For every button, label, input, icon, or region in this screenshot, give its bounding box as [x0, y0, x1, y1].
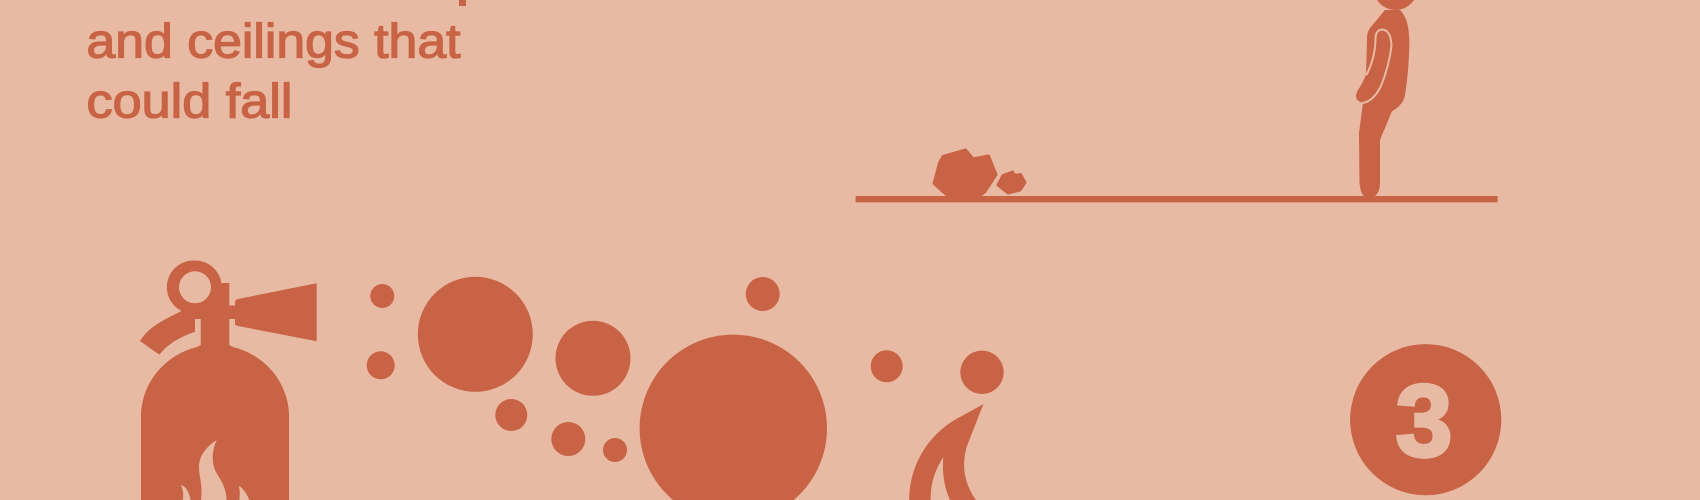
- text block: hazard description: and ceilings that: [86, 16, 460, 68]
- icon: fallen rocks: [934, 150, 1025, 196]
- icon: flame cut-out: [181, 440, 249, 500]
- text block: hazard description: could fall: [86, 76, 292, 128]
- step number badge: 3: [1396, 364, 1452, 478]
- step number badge: [1350, 344, 1501, 495]
- text block: hazard description: [86, 0, 466, 128]
- icon: standing person: [1356, 0, 1418, 196]
- spray particles: [367, 277, 1004, 500]
- icon: flame: [909, 404, 983, 500]
- icon: fire extinguisher: [140, 260, 317, 500]
- ground line: [856, 196, 1498, 202]
